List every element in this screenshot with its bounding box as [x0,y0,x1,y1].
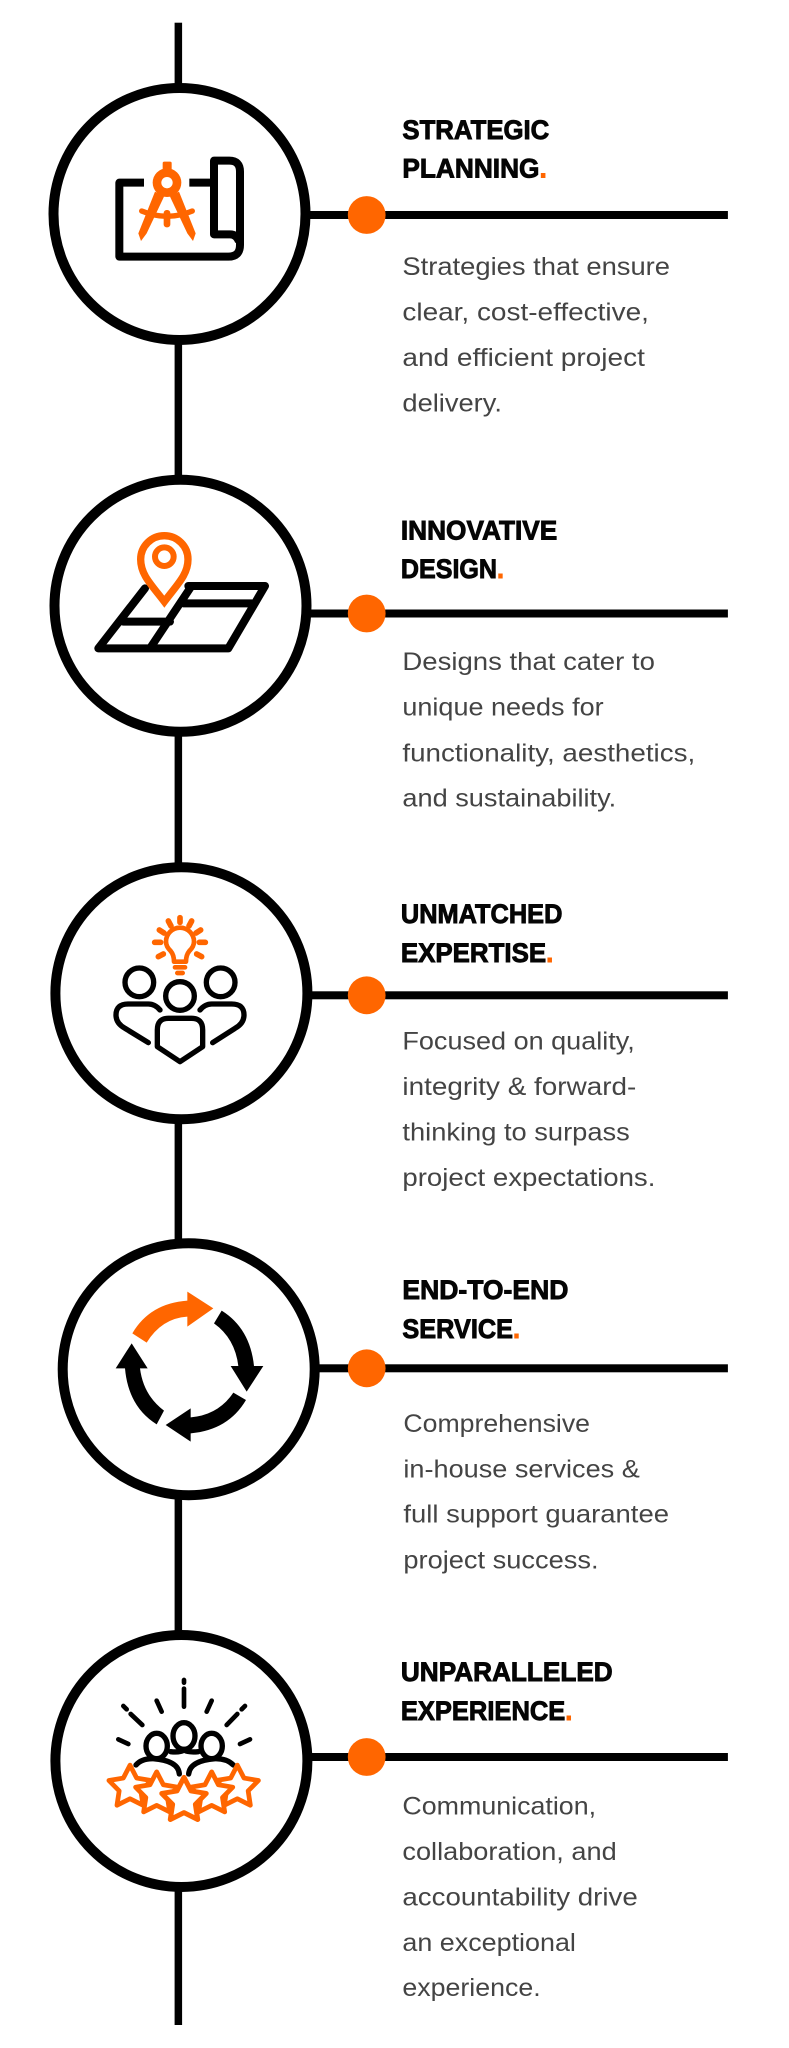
panel: end-to-end service [63,1243,728,1574]
body text [402,648,695,813]
connector line [305,211,728,219]
orange dot [348,1349,386,1387]
body text [402,1792,638,2002]
heading: END-TO-END [402,1275,568,1305]
circle badge [55,867,307,1119]
panel: strategic planning [54,88,728,418]
body text: collaboration, and [402,1838,617,1866]
connector line [313,1364,728,1372]
heading line two: PLANNING. [402,154,547,184]
heading line two: SERVICE. [402,1314,520,1344]
body text: functionality, aesthetics, [402,739,695,767]
icon: cycle arrows [116,1292,263,1442]
body text: Communication, [402,1792,596,1820]
icon: blueprint and compass [119,161,240,257]
heading line two: EXPERTISE. [401,938,553,968]
body text: delivery. [402,390,502,418]
icon: team with five stars [109,1680,258,1820]
icon: team with light bulb [116,918,244,1062]
heading line two: DESIGN. [401,554,504,584]
connector line [305,991,728,999]
body text [402,1027,655,1192]
vertical timeline line [175,23,182,2025]
heading: UNMATCHED [401,899,562,929]
body text: Designs that cater to [402,648,655,676]
body text: in-house services & [403,1455,640,1483]
circle badge [54,480,306,732]
heading: UNPARALLELED [401,1657,613,1687]
body text: unique needs for [402,694,604,722]
body text: an exceptional [402,1929,576,1957]
circle badge [63,1243,315,1495]
body text: project success. [403,1546,599,1574]
orange dot [348,1738,386,1776]
body text [403,1410,669,1574]
orange dot [348,976,386,1014]
body text: Focused on quality, [402,1027,635,1055]
panel: unmatched expertise [55,867,728,1192]
body text: experience. [402,1974,541,2002]
heading: STRATEGIC [402,115,549,145]
body text: full support guarantee [403,1501,669,1529]
body text: and efficient project [402,344,645,372]
orange dot [348,196,386,234]
body text: Strategies that ensure [402,253,670,281]
body text: clear, cost-effective, [402,299,649,327]
panel: innovative design [54,480,728,813]
body text: Comprehensive [403,1410,590,1438]
body text: thinking to surpass [402,1119,630,1147]
panel: unparalleled experience [55,1635,728,2002]
body text: and sustainability. [402,785,616,813]
circle badge [55,1635,307,1887]
body text: project expectations. [402,1164,655,1192]
connector line [305,1753,728,1761]
heading: INNOVATIVE [401,516,557,546]
body text: integrity & forward- [402,1073,636,1101]
orange dot [348,595,386,632]
body text: accountability drive [402,1883,638,1911]
heading line two: EXPERIENCE. [401,1696,572,1726]
circle badge [54,88,306,340]
icon: map with location pin [98,536,265,648]
body text [402,253,670,418]
connector line [305,610,728,618]
